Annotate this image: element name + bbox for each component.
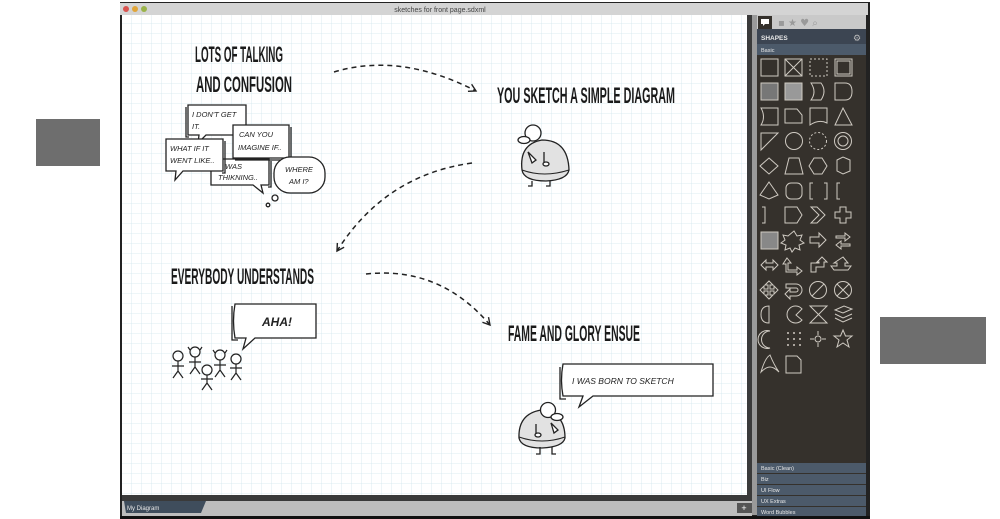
bottom library list xyxy=(757,463,866,516)
bubble: I was born to sketch: I WAS BORN TO SKETCH xyxy=(572,376,675,386)
bubble: was thinking: WAS xyxy=(225,162,242,171)
thought bubble: where am I xyxy=(266,157,325,207)
right panel: ▪ ★ ♥ ⌕ xyxy=(778,18,818,29)
heading: lots of talking xyxy=(195,42,292,97)
icon: duck character 1 xyxy=(518,125,569,186)
text: LOTS OF TALKING xyxy=(195,42,283,67)
text: FAME AND GLORY ENSUE xyxy=(508,321,640,346)
bubble: what if it went like: WHAT IF IT xyxy=(170,144,210,153)
arrow: to fame xyxy=(366,273,490,325)
thought bubble: where am I: AM I? xyxy=(288,177,309,186)
icon: duck character 2 xyxy=(519,402,565,454)
bubble: can you imagine xyxy=(233,125,291,160)
title bar xyxy=(120,3,868,15)
right panel xyxy=(757,15,866,516)
app window xyxy=(120,2,870,519)
bottom library list: Word Bubbles xyxy=(761,510,796,516)
right panel: ⚙ xyxy=(853,34,861,44)
title bar: sketches for front page.sdxml xyxy=(394,7,486,14)
gray box right xyxy=(880,317,986,364)
bottom library list: Biz xyxy=(761,477,769,483)
bubble: I don't get it xyxy=(186,105,246,143)
canvas xyxy=(122,15,747,495)
right panel: SHAPES xyxy=(761,35,788,42)
bubble: I don't get it: I DON'T GET xyxy=(192,110,238,119)
gray box left xyxy=(36,119,100,166)
right panel: Basic xyxy=(761,48,775,54)
bubble: was thinking: THIKNING.. xyxy=(218,173,258,182)
bubble: can you imagine: IMAGINE IF.. xyxy=(238,143,282,152)
bubble: aha xyxy=(232,304,316,349)
bottom library list: UI Flow xyxy=(761,488,780,494)
arrow: to sketch xyxy=(334,65,476,91)
text: YOU SKETCH A SIMPLE DIAGRAM xyxy=(497,83,675,108)
bottom library list: UX Extras xyxy=(761,499,786,505)
shape grid xyxy=(758,59,852,373)
bottom library list: Basic (Clean) xyxy=(761,466,794,472)
bubble cluster: confusion xyxy=(166,105,325,207)
bottom tab bar xyxy=(122,495,752,516)
bottom tab bar: + xyxy=(741,503,747,513)
bubble: can you imagine: CAN YOU xyxy=(239,130,274,139)
bubble: was thinking xyxy=(211,159,271,193)
heading: lots of talking: AND CONFUSION xyxy=(196,72,292,97)
bubble: aha: AHA! xyxy=(261,315,292,329)
bubble: I don't get it: IT. xyxy=(192,122,200,131)
text: EVERYBODY UNDERSTANDS xyxy=(171,264,314,289)
bubble: I was born to sketch xyxy=(560,364,713,407)
bottom tab bar: My Diagram xyxy=(127,506,159,512)
bubble: what if it went like xyxy=(166,139,225,180)
arrow: to everybody xyxy=(337,163,472,251)
icon: stick figures xyxy=(172,347,242,390)
thought bubble: where am I: WHERE xyxy=(285,165,314,174)
bubble: what if it went like: WENT LIKE.. xyxy=(170,156,215,165)
